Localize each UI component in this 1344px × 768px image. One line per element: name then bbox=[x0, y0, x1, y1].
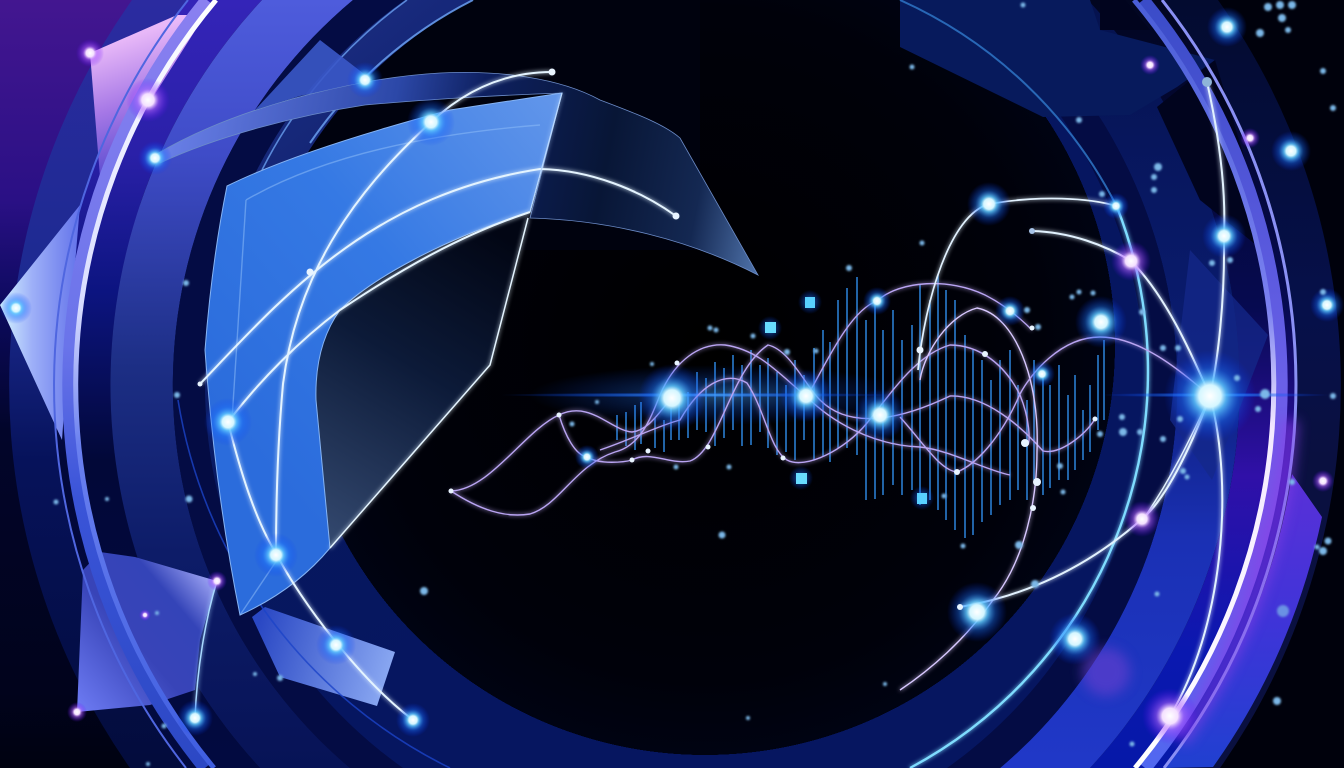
glass panel: dark lower pane bbox=[316, 212, 530, 548]
soft violet glow, lower right bbox=[1082, 648, 1130, 696]
translucent swoosh panel bbox=[155, 72, 758, 275]
facets, upper right bbox=[900, 0, 1275, 480]
glass panel: inner highlights bbox=[232, 125, 540, 615]
horizontal lens flares bbox=[500, 365, 1330, 425]
spectrum bars bbox=[617, 275, 1104, 538]
glass panel: bright folded sheet bbox=[205, 93, 562, 615]
small white points on lines bbox=[198, 68, 1212, 610]
signal waves bbox=[451, 284, 1210, 690]
facet triangles, left side bbox=[0, 15, 395, 712]
thin inner rings bbox=[178, 0, 1148, 768]
dark inner ring strip bbox=[173, 0, 1177, 768]
purple band segment, lower right bbox=[1164, 474, 1322, 768]
facet: upper triangle bbox=[255, 40, 372, 110]
curved connection lines, right bbox=[918, 82, 1224, 716]
inner navy field bbox=[173, 0, 1177, 768]
square markers bbox=[758, 290, 934, 510]
curved connection lines, left bbox=[195, 72, 676, 720]
